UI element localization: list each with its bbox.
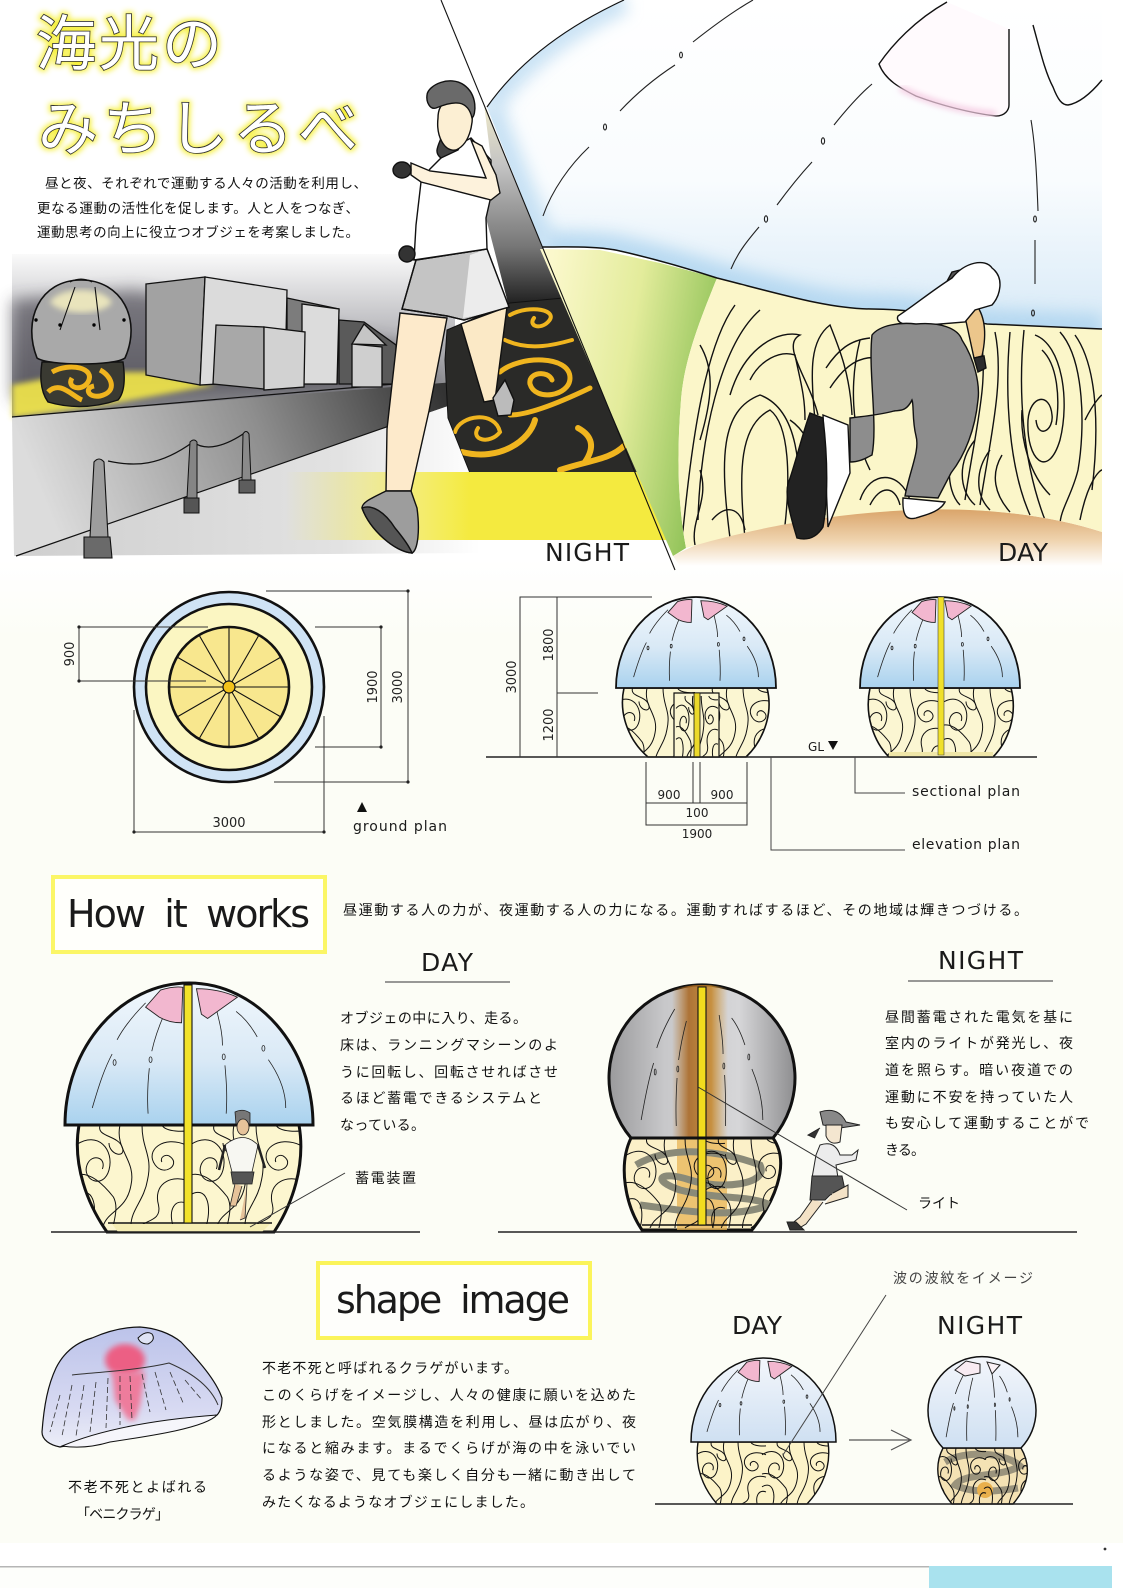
elevation dimension labels: 1800 (542, 628, 557, 662)
night description: 運動に不安を持っていた人 (885, 1089, 1073, 1105)
day shape sculpture (691, 1358, 836, 1506)
divider line (441, 0, 675, 570)
jellyfish caption: 不老不死とよばれる (68, 1479, 207, 1495)
GL marker (808, 740, 838, 754)
night description: 昼間蓄電された電気を基に (885, 1009, 1073, 1025)
day sculpture base with wave lines (678, 278, 1102, 548)
bollards and chain (84, 432, 255, 558)
ground plan label (353, 802, 447, 835)
night heading: NIGHT (938, 946, 1024, 975)
intro text (37, 176, 367, 240)
plan dimension labels: 1900 (366, 670, 381, 704)
elevation dimension labels: 100 (686, 806, 708, 820)
label: DAY: DAY (998, 538, 1049, 567)
plan dimension lines (79, 591, 408, 832)
big night sculpture (609, 985, 795, 1230)
jellyfish caption: 「ベニクラゲ」 (76, 1506, 169, 1522)
night description: 室内のライトが発光し、夜 (885, 1035, 1073, 1051)
panel: hero illustration night and day (12, 0, 1102, 570)
day description: うに回転し、回転させればさせ (340, 1064, 558, 1080)
night small runner (787, 1110, 860, 1230)
night sky (12, 254, 455, 418)
sectional plan callout: sectional plan (912, 784, 1020, 800)
shape image description: 不老不死と呼ばれるクラゲがいます。 (262, 1360, 518, 1376)
plan dimension labels: 3000 (391, 670, 406, 704)
storage device callout (250, 1170, 416, 1227)
night sculpture wedge dome (484, 104, 567, 307)
plan dimension labels: 3000 (212, 816, 246, 831)
GL marker: GL (808, 740, 824, 754)
plan dimension ticks (77, 589, 410, 834)
title: みちしるべ (38, 81, 358, 168)
ground line: how it works (51, 1231, 1077, 1233)
elevation plan callout: elevation plan (912, 837, 1020, 853)
night swirl base (445, 298, 638, 473)
shape image description (262, 1360, 636, 1510)
panel: shape day and night comparison (655, 1270, 1073, 1506)
day person climbing (787, 263, 1000, 539)
night runner (362, 81, 514, 553)
section plan sculpture (860, 597, 1022, 763)
day small runner (219, 1110, 265, 1220)
shape image description: になると縮みます。まるでくらげが海の中を泳いでい (262, 1440, 636, 1456)
panel: how it works day (65, 948, 558, 1232)
intro text: 運動思考の向上に役立つオブジェを考案しました。 (37, 224, 359, 240)
plan dimension labels: 900 (63, 642, 78, 666)
shape image description: このくらげをイメージし、人々の健康に願いを込めた (262, 1387, 636, 1403)
day label: DAY (732, 1311, 783, 1340)
pink top patches (879, 2, 1009, 116)
elevation plan sculpture (615, 597, 776, 763)
light callout (698, 1087, 960, 1211)
elevation dimension labels: 900 (711, 788, 733, 802)
wave callout (783, 1270, 1033, 1455)
sidewalk (14, 395, 480, 556)
ground plan label: ground plan (353, 819, 447, 835)
day description: るほど蓄電できるシステムと (340, 1090, 542, 1106)
yellow lit ground (12, 372, 215, 418)
ground line (655, 1503, 1073, 1505)
elevation and section drawings (486, 597, 1037, 853)
icon: jellyfish illustration (42, 1327, 222, 1447)
shape image description: 形としました。空気膜構造を利用し、昼は広がり、夜 (262, 1414, 636, 1430)
seams (543, 0, 1038, 316)
day floor (673, 508, 1102, 566)
buildings (146, 277, 396, 390)
night description: も安心して運動することがで (885, 1115, 1089, 1131)
jellyfish caption (68, 1479, 207, 1522)
elevation dimension labels: 1200 (542, 708, 557, 742)
how it works summary: 昼運動する人の力が、夜運動する人の力になる。運動すればするほど、その地域は輝きつづける。 (343, 902, 1028, 918)
night yellow glow ground (285, 472, 669, 540)
night label: NIGHT (937, 1311, 1023, 1340)
dark horizon band (12, 290, 440, 400)
elevation dimension lines (520, 597, 747, 825)
day heading: DAY (421, 948, 474, 977)
night mushroom sculpture (32, 279, 131, 407)
heading: How it works (53, 877, 325, 952)
road (12, 380, 480, 556)
intro text: 昼と夜、それぞれで運動する人々の活動を利用し、 (45, 176, 367, 191)
heading: How it works: How it works (67, 892, 310, 936)
paper tint (0, 560, 1123, 1543)
day heading (385, 948, 510, 982)
panel: how it works night (609, 946, 1089, 1230)
bottom page strip (0, 1543, 1123, 1588)
arrow: day to night (849, 1430, 911, 1450)
elevation dimension labels: 900 (658, 788, 680, 802)
night shape sculpture (928, 1357, 1036, 1506)
shape image description: みたくなるようなオブジェにしました。 (262, 1494, 534, 1510)
elevation plan callout (771, 757, 1020, 853)
heading: shape image (318, 1263, 590, 1338)
wave callout: 波の波紋をイメージ (893, 1270, 1033, 1286)
plan dimension labels (63, 642, 406, 831)
ground plan drawing (63, 589, 447, 835)
label: NIGHT: NIGHT (545, 538, 630, 567)
big day sculpture (65, 983, 313, 1232)
plan circles (134, 592, 324, 782)
light callout: ライト (918, 1195, 960, 1211)
day description: オブジェの中に入り、走る。 (340, 1010, 527, 1026)
day description (340, 1010, 558, 1133)
night description: きる。 (885, 1142, 925, 1158)
day description: 床は、ランニングマシーンのよ (340, 1037, 558, 1053)
storage device callout: 蓄電装置 (355, 1170, 416, 1186)
elevation dimension labels (505, 628, 733, 841)
heading: shape image: shape image (336, 1278, 570, 1322)
shape image description: るような姿で、見ても楽しく自分も一緒に動き出して (262, 1467, 636, 1483)
elevation dimension labels: 3000 (505, 660, 520, 694)
light beam (540, 249, 717, 556)
day description: なっている。 (340, 1117, 425, 1133)
road edge lines (12, 384, 395, 556)
night description (885, 1009, 1089, 1158)
intro text: 更なる運動の活性化を促します。人と人をつなぎ、 (37, 201, 359, 216)
elevation dimension labels: 1900 (682, 827, 712, 841)
ground line (486, 756, 1037, 758)
night description: 道を照らす。暗い夜道での (885, 1062, 1073, 1078)
sectional plan callout (855, 757, 1020, 800)
day dome (487, 0, 1102, 329)
title (36, 0, 358, 168)
